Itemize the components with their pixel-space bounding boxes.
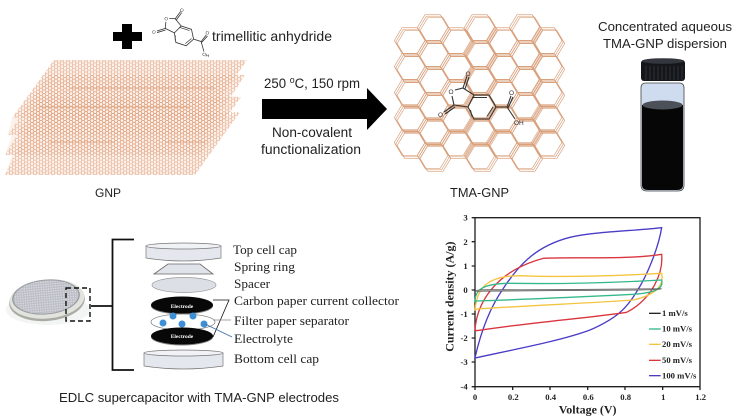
y tick labels: -2 bbox=[460, 333, 468, 343]
coin cell photo bbox=[6, 276, 90, 325]
x tick labels: 0.8 bbox=[620, 392, 632, 402]
top cell cap bbox=[146, 243, 221, 261]
legend: 50 mV/s bbox=[662, 355, 693, 365]
top electrode bbox=[151, 296, 213, 314]
curve: 50 mV/s bbox=[475, 254, 662, 331]
component labels: Spacer bbox=[234, 277, 271, 291]
y tick labels: 2 bbox=[463, 237, 468, 247]
caption: EDLC supercapacitor: EDLC supercapacitor with TMA-GNP electrodes bbox=[59, 390, 339, 405]
curve: 20 mV/s bbox=[475, 273, 662, 310]
adsorbed TMA molecule bbox=[438, 71, 524, 127]
electrolyte drops bbox=[160, 312, 208, 328]
functionalization label: functionalization bbox=[261, 142, 361, 157]
y tick labels: -1 bbox=[460, 309, 468, 319]
curve: 10 mV/s bbox=[475, 280, 662, 302]
spacer bbox=[152, 278, 216, 292]
legend: 10 mV/s bbox=[662, 324, 693, 334]
bottom electrode: Electrode bbox=[171, 334, 194, 340]
dispersion heading bbox=[598, 19, 733, 51]
dashed selection box bbox=[66, 288, 90, 321]
y tick labels: 3 bbox=[463, 213, 468, 223]
legend: 20 mV/s bbox=[662, 339, 693, 349]
dispersion heading: Concentrated aqueous bbox=[598, 19, 733, 34]
component labels: Spring ring bbox=[234, 260, 296, 274]
component labels: Bottom cell cap bbox=[234, 352, 319, 366]
GNP stacked graphene layers bbox=[5, 60, 247, 175]
trimellitic anhydride molecule bbox=[150, 1, 221, 59]
x axis title: Voltage (V) bbox=[559, 403, 617, 417]
legend: 100 mV/s bbox=[662, 370, 697, 380]
label: trimellitic anhydride: trimellitic anhydride bbox=[212, 28, 332, 44]
y axis title: Current density (A/g) bbox=[442, 242, 456, 352]
TMA-GNP honeycomb lattice bbox=[394, 15, 565, 171]
component labels: Carbon paper current collector bbox=[234, 294, 400, 308]
component labels bbox=[233, 243, 400, 366]
legend: 1 mV/s bbox=[662, 308, 688, 318]
y tick labels: 1 bbox=[463, 261, 468, 271]
x tick labels: 0.4 bbox=[545, 392, 557, 402]
component labels: Electrolyte bbox=[234, 332, 293, 346]
top electrode: Electrode bbox=[171, 304, 194, 310]
plus sign bbox=[113, 24, 142, 49]
icon: vial of dispersion bbox=[641, 58, 685, 191]
reaction arrow bbox=[262, 88, 387, 130]
y tick labels bbox=[460, 213, 468, 392]
bottom cell cap bbox=[144, 350, 223, 369]
exploded view bracket bbox=[91, 240, 134, 370]
label: TMA-GNP: TMA-GNP bbox=[450, 186, 509, 200]
curve: 100 mV/s bbox=[475, 228, 662, 358]
leader lines bbox=[205, 300, 232, 337]
process conditions: 250 bbox=[264, 76, 287, 91]
label: GNP: GNP bbox=[95, 186, 121, 200]
x tick labels: 0.2 bbox=[508, 392, 519, 402]
cyclic voltammetry chart bbox=[442, 213, 706, 417]
y tick labels: -4 bbox=[460, 382, 468, 392]
spring ring bbox=[154, 264, 213, 274]
x tick labels bbox=[473, 392, 706, 402]
x tick labels: 0.6 bbox=[583, 392, 594, 402]
component labels: Top cell cap bbox=[233, 243, 297, 257]
filter paper separator bbox=[151, 314, 215, 330]
x tick labels: 1 bbox=[661, 392, 665, 402]
dispersion heading: TMA-GNP dispersion bbox=[603, 36, 727, 51]
curve: 1 mV/s bbox=[475, 289, 662, 291]
functionalization label: Non-covalent bbox=[272, 125, 352, 140]
process conditions: C, 150 rpm bbox=[295, 76, 360, 91]
y tick labels: 0 bbox=[463, 285, 468, 295]
functionalization label bbox=[261, 125, 361, 157]
y tick labels: -3 bbox=[460, 357, 468, 367]
plot frame bbox=[472, 218, 700, 390]
x tick labels: 0 bbox=[473, 392, 477, 402]
legend bbox=[649, 308, 697, 380]
process conditions: o bbox=[290, 75, 295, 85]
bottom electrode bbox=[151, 328, 213, 346]
x tick labels: 1.2 bbox=[695, 392, 706, 402]
component labels: Filter paper separator bbox=[234, 314, 350, 328]
